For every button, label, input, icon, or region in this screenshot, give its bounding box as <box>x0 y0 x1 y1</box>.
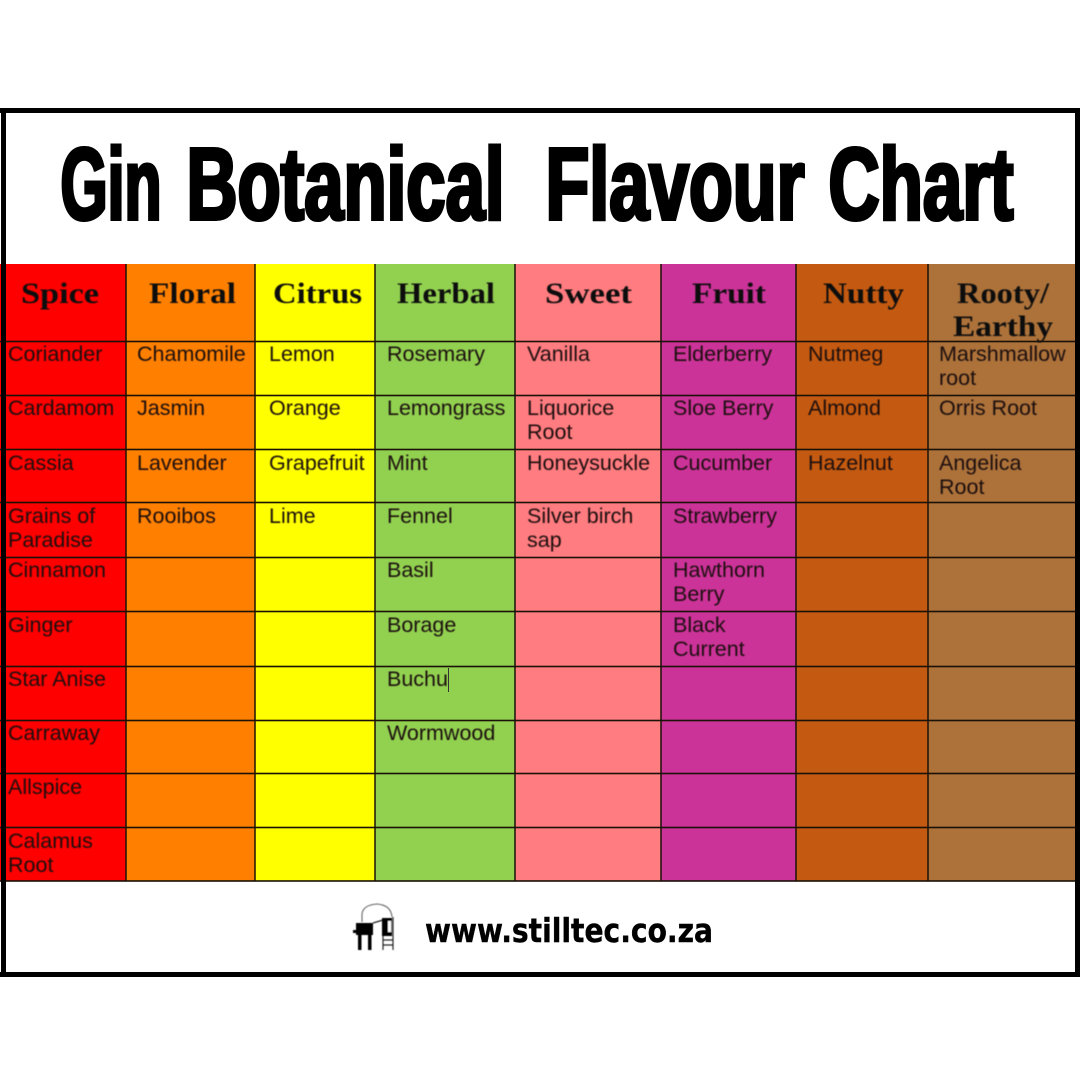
cell: Coriander: Coriander <box>8 342 102 366</box>
cell: Cucumber: Cucumber <box>673 451 772 475</box>
column: Rooty/Earthy <box>928 264 1075 881</box>
cell: Cassia: Cassia <box>8 451 74 475</box>
column: Citrus <box>255 264 375 881</box>
icon: still <box>353 904 393 950</box>
cell: Fennel: Fennel <box>387 504 453 528</box>
heading: Citrus: Citrus <box>273 277 362 310</box>
cell: Orange: Orange <box>269 396 341 420</box>
cell: Almond: Almond <box>808 396 881 420</box>
cell: Chamomile: Chamomile <box>137 342 246 366</box>
heading: Rooty/Earthy <box>953 277 1053 343</box>
cell: Hawthorn Berry: Hawthorn <box>673 558 765 582</box>
cell: Borage: Borage <box>387 613 456 637</box>
heading: Spice: Spice <box>21 277 99 310</box>
cell: Angelica Root: Root <box>939 475 984 499</box>
cell: Liquorice Root: Root <box>527 420 572 444</box>
cell: Black Current: Black <box>673 613 726 637</box>
cell: Lemongrass: Lemongrass <box>387 396 505 420</box>
cell: Orris Root: Orris Root <box>939 396 1037 420</box>
cell: Calamus Root: Root <box>8 853 53 877</box>
cell: Jasmin: Jasmin <box>137 396 205 420</box>
cell: Marshmallow root: root <box>939 366 976 390</box>
heading: Rooty/Earthy: Earthy <box>953 310 1053 343</box>
column: Spice <box>0 264 126 881</box>
cell: Lavender: Lavender <box>137 451 227 475</box>
cell: Hazelnut: Hazelnut <box>808 451 893 475</box>
heading: Nutty: Nutty <box>823 277 904 310</box>
cell: Grains of Paradise: Paradise <box>8 528 93 552</box>
cell: Sloe Berry: Sloe Berry <box>673 396 774 420</box>
cell: Carraway: Carraway <box>8 721 100 745</box>
cell: Mint: Mint <box>387 451 428 475</box>
cell: Lime: Lime <box>269 504 316 528</box>
column: Sweet <box>515 264 661 881</box>
cell: Vanilla: Vanilla <box>527 342 590 366</box>
cell: Lemon: Lemon <box>269 342 335 366</box>
title: Flavour <box>546 126 804 242</box>
cell: Rosemary: Rosemary <box>387 342 485 366</box>
cell: Cardamom: Cardamom <box>8 396 114 420</box>
cell: Calamus Root: Calamus <box>8 829 93 853</box>
heading: Sweet: Sweet <box>545 277 632 310</box>
cell: Grains of Paradise: Grains of <box>8 504 95 528</box>
column: Herbal <box>375 264 515 881</box>
panel: flavour table <box>0 264 1075 881</box>
heading: Floral: Floral <box>149 277 236 310</box>
column: Nutty <box>796 264 928 881</box>
cell: Silver birch sap: Silver birch <box>527 504 633 528</box>
title: Gin <box>60 126 162 242</box>
heading: Rooty/Earthy: Rooty/ <box>957 277 1050 310</box>
heading: Herbal: Herbal <box>397 277 495 310</box>
cell: Strawberry: Strawberry <box>673 504 777 528</box>
cell: Ginger: Ginger <box>8 613 73 637</box>
cell: Black Current: Current <box>673 637 745 661</box>
cell: Silver birch sap: sap <box>527 528 562 552</box>
cell: Cinnamon: Cinnamon <box>8 558 106 582</box>
cell: Elderberry: Elderberry <box>673 342 772 366</box>
column: Floral <box>126 264 255 881</box>
cell: Grapefruit: Grapefruit <box>269 451 365 475</box>
title <box>60 126 1014 242</box>
cell: Hawthorn Berry: Berry <box>673 582 725 606</box>
column: Fruit <box>661 264 796 881</box>
cell: Allspice: Allspice <box>8 775 82 799</box>
cell: Honeysuckle: Honeysuckle <box>527 451 650 475</box>
cell: Angelica Root: Angelica <box>939 451 1021 475</box>
cell: Nutmeg: Nutmeg <box>808 342 883 366</box>
cell: Basil: Basil <box>387 558 434 582</box>
cell: Buchu: Buchu <box>387 667 448 691</box>
cell: Star Anise: Star Anise <box>8 667 106 691</box>
cell: Wormwood: Wormwood <box>387 721 495 745</box>
cell: Liquorice Root: Liquorice <box>527 396 614 420</box>
cell: Marshmallow root: Marshmallow <box>939 342 1066 366</box>
cell: Rooibos: Rooibos <box>137 504 216 528</box>
title: Botanical <box>186 126 504 242</box>
website url: www.stilltec.co.za <box>425 912 713 950</box>
heading: Fruit: Fruit <box>692 277 766 310</box>
